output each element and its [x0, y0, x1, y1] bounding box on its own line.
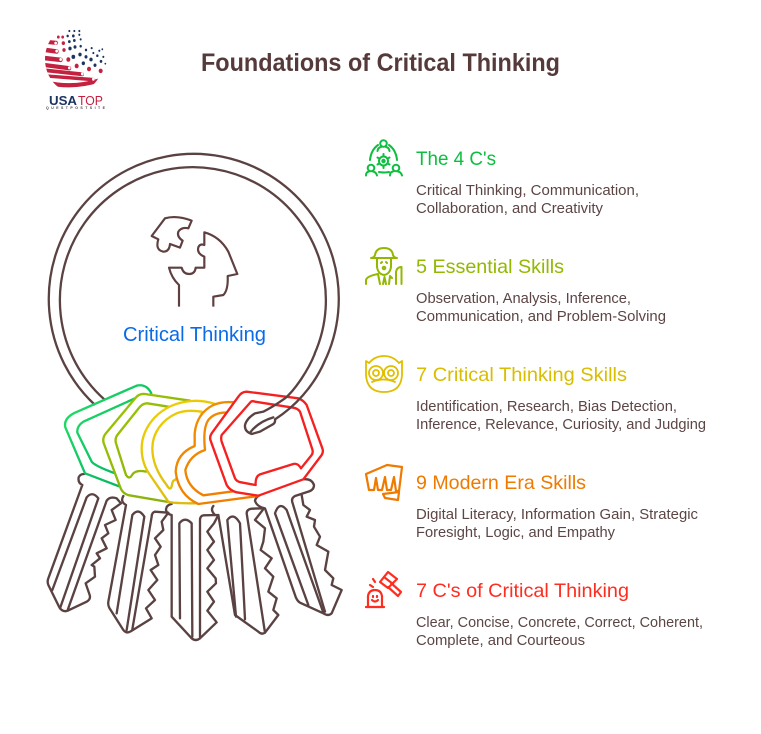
icon: team with gear [366, 140, 402, 176]
description: Complete, and Courteous [416, 633, 585, 649]
description: Identification, Research, Bias Detection, [416, 399, 677, 415]
logo stripes [40, 41, 99, 85]
description: Communication, and Problem-Solving [416, 309, 666, 325]
tag: green [65, 385, 152, 487]
icon: man with hat and cane [366, 248, 402, 284]
description: Observation, Analysis, Inference, [416, 291, 631, 307]
key 3 [166, 504, 218, 640]
key 1 [48, 474, 121, 611]
tags [65, 385, 258, 504]
tag: red [210, 392, 323, 496]
item 2: 5 Essential Skills [366, 248, 666, 325]
ring end through red tag [245, 354, 324, 434]
description [416, 183, 639, 217]
description: Critical Thinking, Communication, [416, 183, 639, 199]
key 4 [218, 508, 278, 634]
description: Clear, Concise, Concrete, Correct, Coherent, [416, 615, 703, 631]
logo tagline: QUESTPOSTSITE [46, 106, 106, 110]
logo navy dots [66, 30, 106, 67]
heading: 7 C's of Critical Thinking [416, 580, 629, 602]
icon: fist [366, 465, 402, 500]
item 1: The 4 C's [366, 140, 639, 217]
heading: 7 Critical Thinking Skills [416, 364, 627, 386]
description [416, 291, 666, 325]
logo red dots [57, 36, 103, 73]
item 5: 7 C's of Critical Thinking [366, 572, 703, 649]
logo [40, 30, 106, 110]
key 5 [255, 479, 342, 615]
tag: olive [103, 394, 190, 502]
key ring [49, 154, 339, 405]
label: Critical Thinking: Critical Thinking [123, 324, 266, 346]
icon: owl face [366, 356, 402, 392]
description: Foresight, Logic, and Empathy [416, 525, 616, 541]
tag: yellow [142, 401, 215, 503]
description [416, 507, 698, 541]
description [416, 615, 703, 649]
item 3: 7 Critical Thinking Skills [366, 356, 706, 433]
logo: TOP [78, 93, 103, 108]
logo white dots [54, 42, 95, 81]
description: Collaboration, and Creativity [416, 201, 604, 217]
icon: gavel and alarm [366, 572, 401, 607]
description: Digital Literacy, Information Gain, Strategic [416, 507, 698, 523]
heading: The 4 C's [416, 148, 496, 170]
icon: head with puzzle piece [152, 217, 237, 307]
keys [48, 474, 342, 640]
heading: 5 Essential Skills [416, 256, 564, 278]
title: Foundations of Critical Thinking [201, 49, 560, 77]
key 2 [108, 496, 168, 632]
infographic canvas [45, 30, 706, 648]
heading: 9 Modern Era Skills [416, 472, 586, 494]
item 4: 9 Modern Era Skills [366, 465, 698, 541]
tag: orange [176, 402, 258, 504]
logo globe [40, 30, 106, 85]
description [416, 399, 706, 433]
logo wordmark: USA [49, 93, 78, 108]
description: Inference, Relevance, Curiosity, and Judging [416, 417, 706, 433]
